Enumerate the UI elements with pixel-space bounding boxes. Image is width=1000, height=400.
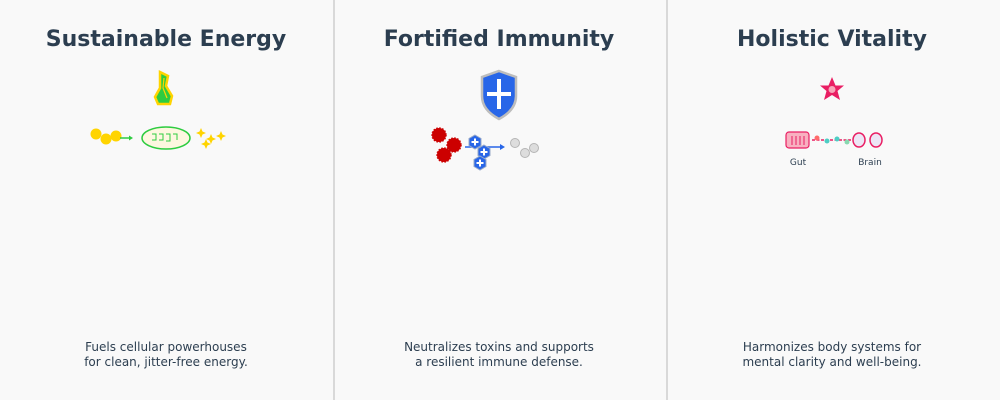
icon: pathogens bbox=[432, 128, 461, 162]
panel: fortified immunity: a resilient immune defense. bbox=[415, 355, 583, 369]
label: Gut: Gut bbox=[790, 158, 807, 168]
icon: glucose molecules with arrow bbox=[90, 128, 133, 144]
icon: shield with cross bbox=[482, 71, 516, 119]
icon: neutralized particles bbox=[510, 138, 538, 158]
text: energy description: Fuels cellular powerhouses bbox=[85, 340, 247, 354]
title: Sustainable Energy: Sustainable Energy bbox=[46, 27, 286, 52]
text: immunity description: Neutralizes toxins and supports bbox=[404, 340, 594, 354]
icon: mitochondrion bbox=[142, 127, 190, 149]
text: vitality description: Harmonizes body systems for bbox=[743, 340, 921, 354]
title: Holistic Vitality: Holistic Vitality bbox=[737, 27, 927, 52]
icon: immune cells with arrow bbox=[465, 135, 505, 170]
panel: holistic vitality bbox=[737, 27, 927, 369]
icon: star bbox=[820, 77, 844, 100]
icon: brain bbox=[853, 133, 882, 147]
icon: energy bolt bbox=[155, 72, 172, 104]
icon: gut bbox=[786, 132, 809, 148]
icon: sparkles bbox=[196, 128, 226, 149]
panel: sustainable energy bbox=[46, 27, 286, 369]
title: Fortified Immunity: Fortified Immunity bbox=[384, 27, 614, 52]
label: Brain: Brain bbox=[858, 158, 882, 168]
panel: holistic vitality: mental clarity and well-being. bbox=[742, 355, 922, 369]
panel: fortified immunity bbox=[384, 27, 614, 369]
icon: gut-brain axis bbox=[812, 136, 852, 144]
panel: sustainable energy: for clean, jitter-free energy. bbox=[84, 355, 248, 369]
